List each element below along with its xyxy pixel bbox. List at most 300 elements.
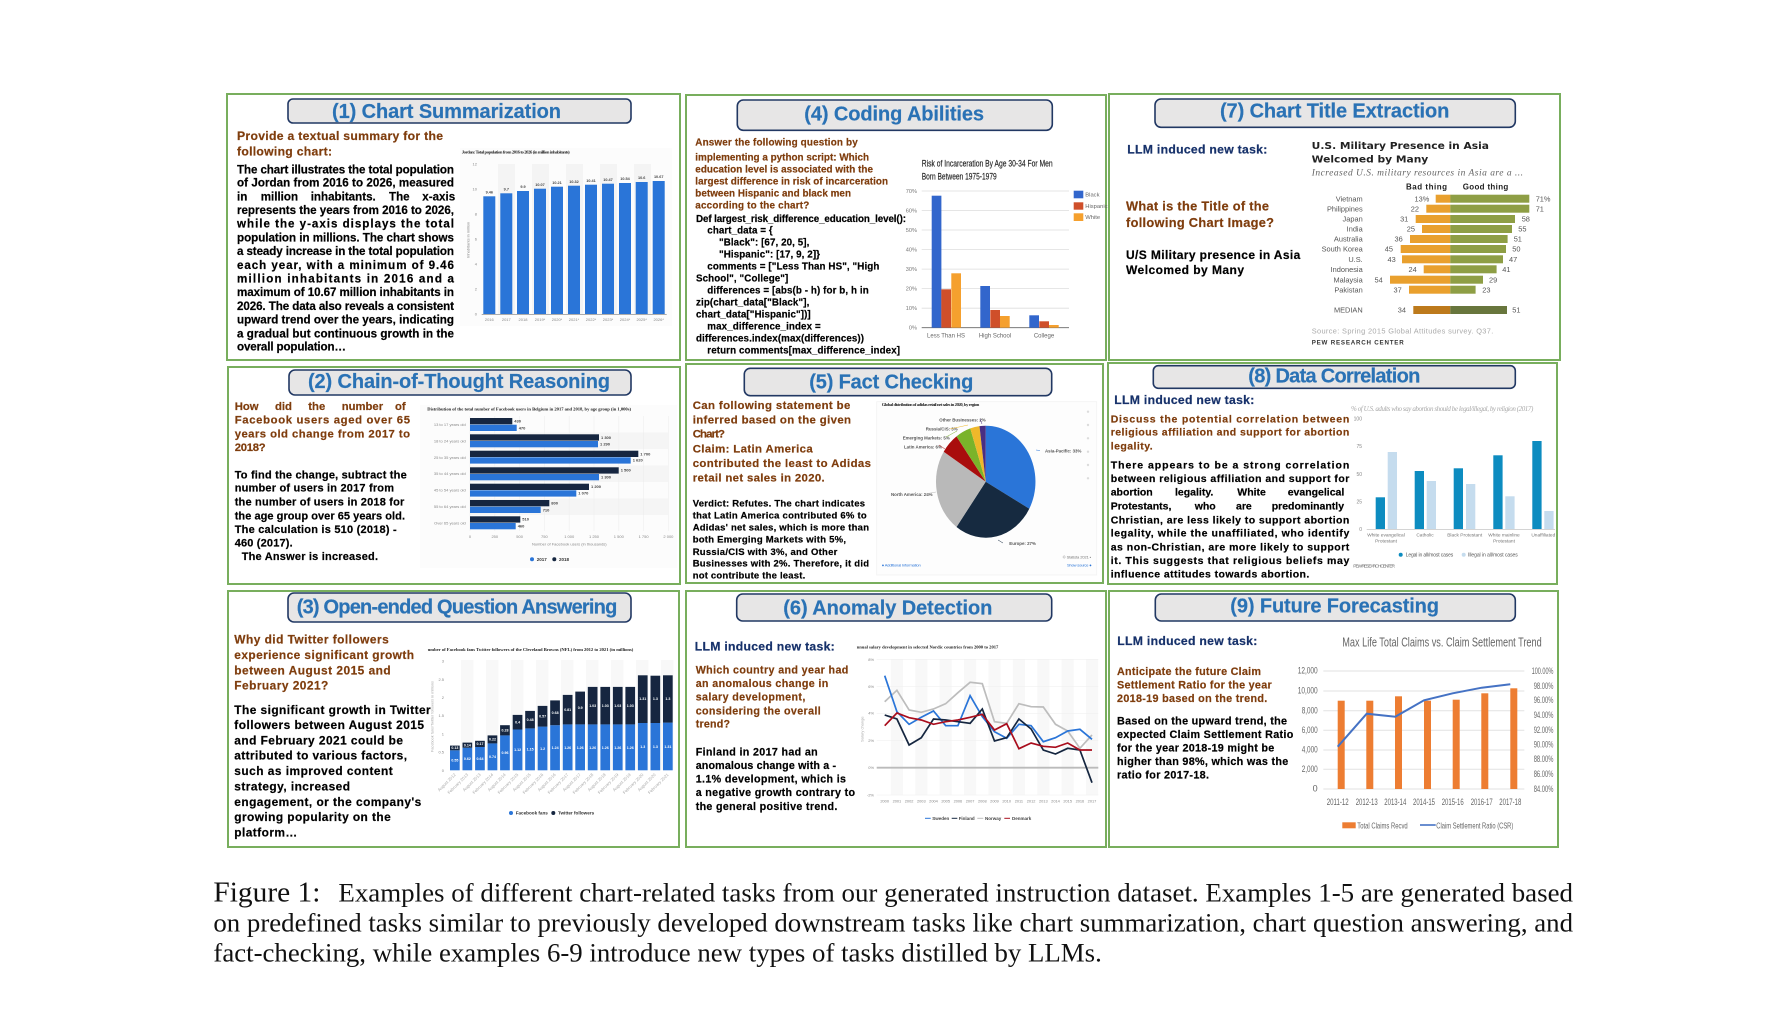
grouped bar chart: abortion legality by religion: 25 xyxy=(1356,500,1362,506)
bar chart: risk of incarceration: 20% xyxy=(906,287,917,293)
bar chart: Jordan population: 2019* xyxy=(535,317,546,322)
stacked bar chart: Cleveland Browns followers: 1.03 xyxy=(589,704,596,708)
bar chart: risk of incarceration: Risk of Incarceration By Age 30-34 For Men xyxy=(922,159,1053,169)
question text xyxy=(696,664,848,731)
line chart: Nordic salary development: 2003 xyxy=(917,799,926,804)
diverging bar chart: US military presence: 43 xyxy=(1387,255,1396,264)
diverging bar chart: US military presence: 13% xyxy=(1415,194,1430,203)
stacked bar chart: Cleveland Browns followers: February 2019 xyxy=(597,772,620,795)
answer text: each year, with a minimum of 9.46 xyxy=(237,259,455,272)
figure caption xyxy=(213,877,1573,968)
diverging bar chart: US military presence: Indonesia xyxy=(1331,265,1364,274)
combo chart: claims vs settlement ratio: 0 xyxy=(1313,784,1318,794)
stacked bar chart: Cleveland Browns followers: 0.48 xyxy=(527,718,534,722)
bar chart: Jordan population xyxy=(460,148,672,326)
answer text: a gradual but continuous growth in the xyxy=(237,327,455,340)
answer text: predominantly xyxy=(1272,501,1344,513)
pie chart: adidas net sales by region: Other Businesses: 2% xyxy=(939,417,986,422)
diverging bar chart: US military presence: 36 xyxy=(1394,235,1403,244)
bar chart: Jordan population: 2025* xyxy=(636,317,647,322)
answer text: 460 (2017). xyxy=(235,538,293,550)
combo chart: claims vs settlement ratio: 98.00% xyxy=(1534,681,1553,691)
line chart: Nordic salary development: 2001 xyxy=(893,799,901,804)
answer text: of Jordan from 2016 to 2026, measured xyxy=(237,177,454,190)
stacked bar chart: Cleveland Browns followers: 0.62 xyxy=(464,757,471,761)
panel: future forecasting xyxy=(1109,591,1558,847)
horizontal bar chart: Facebook users in Belgium: Number of Facebook users (in thousands) xyxy=(532,541,607,546)
diverging bar chart: US military presence: 47 xyxy=(1509,255,1517,264)
line chart: Nordic salary development: Norway xyxy=(985,816,1002,821)
python code answer: differences.index(max(differences)) xyxy=(696,334,864,345)
line chart: Nordic salary development: 2013 xyxy=(1039,799,1048,804)
stacked bar chart: Cleveland Browns followers: 1.26 xyxy=(577,746,584,750)
question text: Settlement Ratio for the year xyxy=(1117,679,1272,691)
line chart: Nordic salary development: Denmark xyxy=(1012,816,1032,821)
horizontal bar chart: Facebook users in Belgium: 1 300 xyxy=(601,474,612,479)
answer text: a negative growth contrary to xyxy=(696,787,855,799)
stacked bar chart: Cleveland Browns followers: 1.3 xyxy=(640,745,645,749)
diverging bar chart: US military presence: Malaysia xyxy=(1334,275,1364,284)
stacked bar chart: Cleveland Browns followers: 0.5 xyxy=(438,750,445,754)
question and claim text: inferred based on the given xyxy=(693,414,851,426)
horizontal bar chart: Facebook users in Belgium: 710 xyxy=(543,507,550,512)
stacked bar chart: Cleveland Browns followers: 0.22 xyxy=(489,738,496,742)
question text: implementing a python script: Which xyxy=(695,152,869,163)
diverging bar chart: US military presence: U.S. xyxy=(1348,255,1363,264)
answer text: a steady increase in the total population xyxy=(237,245,454,258)
pie chart: adidas net sales by region: ● Additional Information xyxy=(882,563,921,568)
answer text: inhabitants. xyxy=(311,191,376,204)
bar chart: Jordan population: 2016 xyxy=(485,317,495,322)
question text: following Chart Image? xyxy=(1126,215,1274,230)
python code answer: comments = ["Less Than HS", "High xyxy=(707,262,879,273)
stacked bar chart: Cleveland Browns followers: 1.26 xyxy=(614,746,621,750)
line chart: Nordic salary development: 2008 xyxy=(978,799,987,804)
combo chart: claims vs settlement ratio: 86.00% xyxy=(1534,769,1553,779)
bar chart: risk of incarceration: 70% xyxy=(906,189,917,195)
answer text: and February 2021 could be xyxy=(234,733,403,747)
line chart: Nordic salary development: 2004 xyxy=(929,799,939,804)
answer text: who xyxy=(1194,501,1216,513)
combo chart: claims vs settlement ratio: 12,000 xyxy=(1298,666,1318,676)
diverging bar chart: US military presence: South Korea xyxy=(1322,245,1364,254)
heading: coding abilities xyxy=(737,100,1052,130)
python code answer: School", "College"] xyxy=(696,274,788,285)
answer text: legality, while the unaffiliated, who identify xyxy=(1111,528,1349,540)
answer text: ratio for 2017-18. xyxy=(1117,770,1209,782)
question text: years old change from 2017 to xyxy=(235,428,410,440)
grouped bar chart: abortion legality by religion: Unaffiliated xyxy=(1531,533,1556,539)
panel: anomaly detection xyxy=(686,591,1106,847)
answer text: upward trend over the years, indicating xyxy=(237,313,454,326)
question text: education level is associated with the xyxy=(695,165,874,176)
answer text: The Answer is increased. xyxy=(242,551,378,563)
stacked bar chart: Cleveland Browns followers: August 2014 xyxy=(487,772,507,792)
combo chart: claims vs settlement ratio: 2011-12 xyxy=(1327,797,1349,807)
horizontal bar chart: Facebook users in Belgium: 2 000 xyxy=(663,534,674,539)
heading: anomaly detection: (6) Anomaly Detection xyxy=(783,597,992,619)
stacked bar chart: Cleveland Browns followers: August 2020 xyxy=(637,772,657,792)
verdict text: not contribute the least. xyxy=(693,571,805,582)
stacked bar chart: Cleveland Browns followers: 1.3 xyxy=(653,697,658,701)
line chart: Nordic salary development: 2009 xyxy=(990,799,999,804)
question text: of xyxy=(395,401,406,413)
question text xyxy=(695,138,888,211)
stacked bar chart: Cleveland Browns followers: 1.03 xyxy=(614,704,621,708)
question text: 2018-19 based on the trend. xyxy=(1117,693,1267,705)
question text: number xyxy=(342,401,384,413)
bar chart: Jordan population: 4 xyxy=(475,262,478,266)
stacked bar chart: Cleveland Browns followers: 0.74 xyxy=(489,755,496,759)
line chart: Nordic salary development: 2007 xyxy=(966,799,974,804)
diverging bar chart: US military presence: 58 xyxy=(1522,215,1530,224)
horizontal bar chart: Facebook users in Belgium: Distribution of the total number of Facebook users in Belgium in 2017 and 2018, by age group (in 1,000s) xyxy=(427,406,631,411)
question text: Anticipate the future Claim xyxy=(1117,666,1261,678)
bar chart: risk of incarceration: Born Between 1975-1979 xyxy=(922,171,997,181)
icon: chart toolbar xyxy=(1087,410,1089,479)
stacked bar chart: Cleveland Browns followers: February 2016 xyxy=(522,772,545,795)
stacked bar chart: Cleveland Browns followers: 0.14 xyxy=(464,743,471,747)
question and claim text: Claim: Latin America xyxy=(693,444,813,456)
answer text: as non-Christian, are more likely to support xyxy=(1111,542,1350,554)
diverging bar chart: US military presence: Japan xyxy=(1343,215,1363,224)
heading: chain-of-thought reasoning: (2) Chain-of-Thought Reasoning xyxy=(308,371,610,393)
figure caption: Examples of different chart-related tasks from our generated instruction dataset. Examples 1-5 are generated based xyxy=(338,879,1573,908)
stacked bar chart: Cleveland Browns followers: August 2019 xyxy=(612,772,632,792)
stacked bar chart: Cleveland Browns followers: 1 xyxy=(442,732,445,736)
question text: How xyxy=(235,401,259,413)
question text: Answer the following question by xyxy=(695,138,858,149)
stacked bar chart: Cleveland Browns followers: February 2014 xyxy=(471,772,495,795)
question text: following chart: xyxy=(237,145,332,159)
python code answer: zip(chart_data["Black"], xyxy=(696,297,810,308)
bar chart: risk of incarceration: 30% xyxy=(906,267,917,273)
stacked bar chart: Cleveland Browns followers: 1.31 xyxy=(664,745,671,749)
bar chart: Jordan population: 2017 xyxy=(502,317,512,322)
bar chart: Jordan population: 2 xyxy=(475,286,478,292)
horizontal bar chart: Facebook users in Belgium: 750 xyxy=(541,534,549,539)
question text: largest difference in risk of incarceration xyxy=(695,176,888,187)
combo chart: claims vs settlement ratio: 2016-17 xyxy=(1471,797,1493,807)
question text: between Hispanic and black men xyxy=(695,188,851,199)
answer text: There appears to be a strong correlation xyxy=(1111,459,1349,471)
answer text: The calculation is 510 (2018) - xyxy=(235,524,397,536)
combo chart: claims vs settlement ratio: 2,000 xyxy=(1302,764,1318,774)
stacked bar chart: Cleveland Browns followers: 0.4 xyxy=(515,720,520,724)
diverging bar chart: US military presence: Welcomed by Many xyxy=(1312,154,1429,165)
grouped bar chart: abortion legality by religion: PEW RESEARCH CENTER xyxy=(1353,563,1396,569)
stacked bar chart: Cleveland Browns followers: February 2021 xyxy=(647,772,670,795)
bar chart: Jordan population: 2020* xyxy=(552,317,563,322)
horizontal bar chart: Facebook users in Belgium xyxy=(420,405,677,568)
horizontal bar chart: Facebook users in Belgium: 430 xyxy=(514,419,522,424)
pie chart: adidas net sales by region: Russia/CIS: 3% xyxy=(926,427,958,432)
horizontal bar chart: Facebook users in Belgium: 25 to 35 years old xyxy=(434,455,466,460)
answer text: higher than 98%, which was the xyxy=(1117,756,1288,768)
figure caption: Figure 1: xyxy=(213,877,320,909)
answer text: 2026. The data also reveals a consistent xyxy=(237,300,454,313)
stacked bar chart: Cleveland Browns followers: August 2017 xyxy=(562,772,582,792)
diverging bar chart: US military presence: 25 xyxy=(1407,225,1415,234)
question text: the xyxy=(308,401,325,413)
bar chart: risk of incarceration: 40% xyxy=(906,248,917,254)
diverging bar chart: US military presence: 55 xyxy=(1518,225,1527,234)
heading: open-ended question answering: (3) Open-ended Question Answering xyxy=(297,596,617,618)
answer text: strategy, increased xyxy=(234,780,350,794)
question and claim text: Chart? xyxy=(693,429,725,441)
bar chart: risk of incarceration: 60% xyxy=(906,208,917,214)
bar chart: Jordan population: Jordan: Total population from 2016 to 2026 (in million inhabitants) xyxy=(462,149,570,154)
line chart: Nordic salary development xyxy=(857,644,1098,821)
heading: fact checking: (5) Fact Checking xyxy=(809,371,973,393)
line chart: Nordic salary development: 2017 xyxy=(1088,799,1096,804)
answer text: attributed to various factors, xyxy=(234,749,407,763)
horizontal bar chart: Facebook users in Belgium: 250 xyxy=(491,534,499,539)
answer text: Finland in 2017 had an xyxy=(696,746,818,758)
bar chart: risk of incarceration: Less Than HS xyxy=(927,333,965,339)
diverging bar chart: US military presence: 50 xyxy=(1512,245,1521,254)
answer text: while the y-axis displays the total xyxy=(236,218,454,231)
diverging bar chart: US military presence: 29 xyxy=(1489,275,1497,284)
horizontal bar chart: Facebook users in Belgium: 1 290 xyxy=(600,441,611,446)
answer text: The chart illustrates the total population xyxy=(237,163,454,176)
pie chart: adidas net sales by region: Show source ● xyxy=(1067,563,1092,568)
horizontal bar chart: Facebook users in Belgium: 0 xyxy=(469,534,472,539)
stacked bar chart: Cleveland Browns followers: 0.96 xyxy=(502,751,508,755)
answer text: White xyxy=(1237,487,1266,499)
line chart: Nordic salary development: Finland xyxy=(959,816,975,821)
question text: What is the Title of the xyxy=(1126,199,1269,214)
answer text xyxy=(236,163,455,354)
question text: 2018? xyxy=(235,442,266,454)
stacked bar chart: Cleveland Browns followers: umber of Facebook fans Twitter followers of the Cleveland Browns (NFL) from 2012 to 2021 (in millions) xyxy=(428,647,634,652)
answer text: million inhabitants in 2016 and a xyxy=(237,272,455,285)
answer text: x-axis xyxy=(422,191,455,204)
panel: coding abilities xyxy=(686,95,1108,360)
horizontal bar chart: Facebook users in Belgium: 1 620 xyxy=(633,458,643,463)
python code answer: return comments[max_difference_index] xyxy=(707,345,900,356)
answer text: it. This suggests that religious beliefs may xyxy=(1111,555,1349,567)
line chart: Nordic salary development: 2014 xyxy=(1051,799,1061,804)
diverging bar chart: US military presence: 34 xyxy=(1398,306,1406,315)
grouped bar chart: abortion legality by religion: % of U.S. adults who say abortion should be legal/illegal, by religion (2017) xyxy=(1351,405,1534,413)
answer text xyxy=(234,703,431,840)
python code answer: chart_data = { xyxy=(707,226,773,237)
question text: Provide a textual summary for the xyxy=(237,129,443,143)
horizontal bar chart: Facebook users in Belgium: 13 to 17 years old xyxy=(434,422,466,427)
answer text: the age group over 65 years old. xyxy=(235,511,405,523)
combo chart: claims vs settlement ratio: Max Life Total Claims vs. Claim Settlement Trend xyxy=(1342,635,1542,650)
diverging bar chart: US military presence: Bad thing xyxy=(1406,182,1447,191)
stacked bar chart: Cleveland Browns followers: Twitter followers xyxy=(558,811,595,816)
bar chart: Jordan population: 0 xyxy=(475,312,478,316)
panel: open-ended question answering xyxy=(228,591,679,847)
combo chart: claims vs settlement ratio: 88.00% xyxy=(1534,754,1553,764)
answer text: number of users in 2017 from xyxy=(235,483,394,495)
line chart: Nordic salary development: 2005 xyxy=(941,799,950,804)
answer text xyxy=(696,746,855,813)
bar chart: Jordan population: 9.7 xyxy=(504,188,509,192)
stacked bar chart: Cleveland Browns followers: 1.26 xyxy=(627,746,634,750)
answer text: the number of users in 2018 for xyxy=(235,497,405,509)
grouped bar chart: abortion legality by religion: Black Protestant xyxy=(1447,533,1483,539)
diverging bar chart: US military presence: 24 xyxy=(1408,265,1417,274)
line chart: Nordic salary development: nnual salary development in selected Nordic countries from 2000 to 2017 xyxy=(857,644,999,649)
horizontal bar chart: Facebook users in Belgium: 2017 xyxy=(537,557,547,562)
answer text: million xyxy=(261,191,298,204)
combo chart: claims vs settlement ratio: Claim Settlement Ratio (CSR) xyxy=(1436,820,1513,830)
heading: chart title extraction xyxy=(1155,99,1515,127)
answer text: population in millions. The chart shows xyxy=(237,232,454,245)
question and claim text xyxy=(693,400,871,485)
horizontal bar chart: Facebook users in Belgium: 1 750 xyxy=(639,534,649,539)
pie chart: adidas net sales by region: North America: 24% xyxy=(891,492,933,497)
stacked bar chart: Cleveland Browns followers: 0.55 xyxy=(451,758,458,762)
grouped bar chart: abortion legality by religion xyxy=(1351,405,1556,569)
heading: fact checking xyxy=(744,368,1052,396)
stacked bar chart: Cleveland Browns followers: February 2013 xyxy=(446,772,470,795)
bar chart: risk of incarceration: 0% xyxy=(909,326,917,332)
diverging bar chart: US military presence: Vietnam xyxy=(1336,194,1363,203)
question text xyxy=(1126,199,1274,230)
combo chart: claims vs settlement ratio: 2013-14 xyxy=(1384,797,1406,807)
stacked bar chart: Cleveland Browns followers: 1.5 xyxy=(438,713,445,718)
answer text: for the year 2018-19 might be xyxy=(1117,742,1274,754)
verdict text: that Latin America contributed 6% to xyxy=(693,511,867,522)
bar chart: Jordan population: 10.54 xyxy=(620,177,631,181)
answer text xyxy=(1111,459,1350,581)
bar chart: Jordan population: 9.46 xyxy=(486,190,493,194)
question text: Why did Twitter followers xyxy=(234,632,389,646)
combo chart: claims vs settlement ratio: 84.00% xyxy=(1534,784,1553,794)
pie chart: adidas net sales by region: Emerging Markets: 5% xyxy=(903,435,950,440)
stacked bar chart: Cleveland Browns followers: 1.15 xyxy=(527,748,534,752)
bar chart: Jordan population: 2023* xyxy=(603,317,614,322)
horizontal bar chart: Facebook users in Belgium: 1 700 xyxy=(640,451,651,456)
combo chart: claims vs settlement ratio: 10,000 xyxy=(1298,686,1318,696)
diverging bar chart: US military presence: 51 xyxy=(1512,306,1521,315)
bar chart: Jordan population: 8 xyxy=(475,212,478,216)
line chart: Nordic salary development: 2002 xyxy=(905,799,913,804)
bar chart: Jordan population: 10.32 xyxy=(569,180,579,184)
line chart: Nordic salary development: 2011 xyxy=(1015,799,1023,804)
answer text: engagement, or the company's xyxy=(234,795,422,809)
bar chart: Jordan population: 9.9 xyxy=(520,185,526,189)
answer text xyxy=(235,469,407,563)
answer text xyxy=(1117,715,1294,782)
bar chart: Jordan population: Inhabitants in million xyxy=(466,222,470,258)
stacked bar chart: Cleveland Browns followers: August 2018 xyxy=(587,772,607,792)
stacked bar chart: Cleveland Browns followers: February 2018 xyxy=(572,772,595,795)
stacked bar chart: Cleveland Browns followers: February 2020 xyxy=(622,772,645,795)
bar chart: Jordan population: 2026* xyxy=(653,317,664,322)
verdict text: both Emerging Markets with 5%, xyxy=(693,535,846,546)
answer text: maximum of 10.67 million inhabitants in xyxy=(237,286,454,299)
diverging bar chart: US military presence: 41 xyxy=(1502,265,1511,274)
stacked bar chart: Cleveland Browns followers: 1.31 xyxy=(639,697,646,701)
heading: chart title extraction: (7) Chart Title Extraction xyxy=(1220,101,1449,123)
line chart: Nordic salary development: -2% xyxy=(867,792,874,797)
bar chart: Jordan population: 10.47 xyxy=(603,178,613,182)
horizontal bar chart: Facebook users in Belgium: 510 xyxy=(522,517,530,522)
figure panels grid xyxy=(227,94,1560,847)
grouped bar chart: abortion legality by religion: Catholic xyxy=(1416,533,1434,539)
stacked bar chart: Cleveland Browns followers: 1.2 xyxy=(540,747,545,751)
python code answer: chart_data["Hispanic"])] xyxy=(696,310,811,321)
stacked bar chart: Cleveland Browns followers: August 2013 xyxy=(462,772,482,792)
question text: experience significant growth xyxy=(234,648,414,662)
verdict text: Verdict: Refutes. The chart indicates xyxy=(693,499,865,510)
combo chart: claims vs settlement ratio: Total Claims Recvd xyxy=(1357,820,1408,830)
diverging bar chart: US military presence: 54 xyxy=(1374,275,1383,284)
diverging bar chart: US military presence: 71 xyxy=(1536,204,1544,213)
question text: between August 2015 and xyxy=(234,663,391,677)
diverging bar chart: US military presence: 23 xyxy=(1482,285,1491,294)
horizontal bar chart: Facebook users in Belgium: 45 to 54 years old xyxy=(434,488,466,492)
line chart: Nordic salary development: 2% xyxy=(868,738,874,743)
heading: anomaly detection xyxy=(737,594,1052,621)
pie chart: adidas net sales by region: Global distribution of adidas retail net sales in 2020, by region xyxy=(882,402,980,407)
stacked bar chart: Cleveland Browns followers: Facebook fans xyxy=(516,811,548,816)
diverging bar chart: US military presence: 31 xyxy=(1400,215,1408,224)
pie chart: adidas net sales by region: Asia-Pacific: 33% xyxy=(1045,448,1081,453)
grouped bar chart: abortion legality by religion: Illegal in all/most cases xyxy=(1468,552,1518,558)
stacked bar chart: Cleveland Browns followers: 1.24 xyxy=(552,746,559,750)
diverging bar chart: US military presence: U.S. Military Presence in Asia xyxy=(1312,141,1489,152)
diverging bar chart: US military presence: Increased U.S. military resources in Asia are a ... xyxy=(1311,169,1523,179)
stacked bar chart: Cleveland Browns followers: August 2015 xyxy=(512,772,532,792)
stacked bar chart: Cleveland Browns followers: August 2012 xyxy=(437,772,457,792)
grouped bar chart: abortion legality by religion: White mainline xyxy=(1488,533,1520,539)
python code answer: "Hispanic": [17, 9, 2]} xyxy=(719,250,820,261)
grouped bar chart: abortion legality by religion: 50 xyxy=(1356,472,1362,478)
bar chart: risk of incarceration xyxy=(906,159,1108,339)
line chart: Nordic salary development: 2015 xyxy=(1063,799,1072,804)
line chart: Nordic salary development: 6% xyxy=(868,684,874,689)
stacked bar chart: Cleveland Browns followers: 2 xyxy=(442,695,445,700)
horizontal bar chart: Facebook users in Belgium: 55 to 64 years old xyxy=(434,504,466,509)
stacked bar chart: Cleveland Browns followers: 1.26 xyxy=(602,746,609,750)
horizontal bar chart: Facebook users in Belgium: 1 500 xyxy=(614,534,625,539)
question text: Facebook users aged over 65 xyxy=(235,414,410,426)
answer text: overall population… xyxy=(237,341,346,354)
answer text: are xyxy=(1236,501,1252,513)
question text: trend? xyxy=(696,719,730,731)
diverging bar chart: US military presence: PEW RESEARCH CENTER xyxy=(1312,339,1404,346)
panel: chain-of-thought reasoning xyxy=(228,367,680,584)
diverging bar chart: US military presence: Philippines xyxy=(1327,204,1363,213)
answer text: the general positive trend. xyxy=(696,801,837,813)
stacked bar chart: Cleveland Browns followers: August 2016 xyxy=(537,772,557,792)
pie chart: adidas net sales by region: Latin America: 6% xyxy=(904,444,942,449)
stacked bar chart: Cleveland Browns followers: 1.3 xyxy=(653,745,658,749)
line chart: Nordic salary development: 2016 xyxy=(1076,799,1084,804)
diverging bar chart: US military presence: 22 xyxy=(1411,204,1419,213)
question text: did xyxy=(275,401,292,413)
bar chart: risk of incarceration: Black xyxy=(1085,193,1100,199)
python code answer: Def largest_risk_difference_education_level(): xyxy=(696,214,906,225)
answer text: Based on the upward trend, the xyxy=(1117,715,1287,727)
combo chart: claims vs settlement ratio: 6,000 xyxy=(1302,725,1318,735)
bar chart: Jordan population: 12 xyxy=(473,162,478,166)
stacked bar chart: Cleveland Browns followers: 2.5 xyxy=(438,677,445,682)
grouped bar chart: abortion legality by religion: 75 xyxy=(1356,444,1362,450)
line chart: Nordic salary development: 0% xyxy=(868,765,874,770)
answer text: such as improved content xyxy=(234,764,393,778)
stacked bar chart: Cleveland Browns followers: February 2017 xyxy=(547,772,570,795)
answer text: The xyxy=(389,191,410,204)
verdict text: Businesses with 2%. Therefore, it did xyxy=(693,559,869,570)
